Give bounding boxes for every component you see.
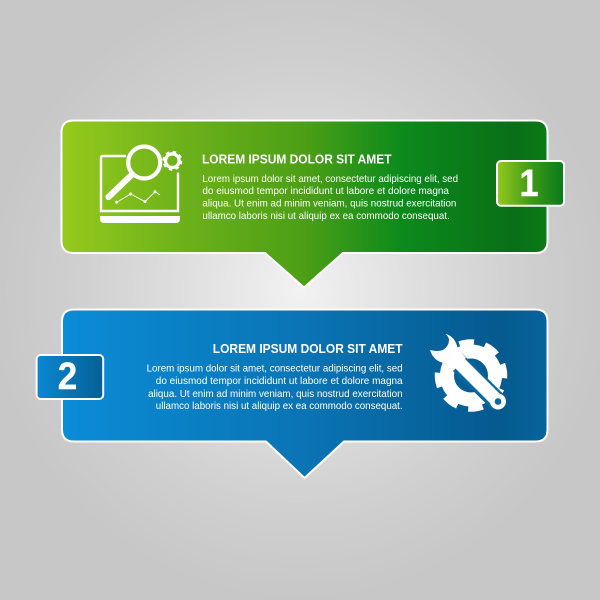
number badge 2: [37, 355, 103, 399]
number badge 1: 1: [520, 163, 538, 205]
icon: laptop with magnifier and gear: [100, 146, 181, 223]
icon: wrench and gear: [430, 334, 506, 410]
body text 2: ullamco laboris nisi ut aliquip ex ea commodo consequat.: [156, 401, 403, 412]
body text 2: do eiusmod tempor incididunt ut labore et dolore magna: [156, 376, 403, 387]
panel: step 1: [62, 120, 564, 288]
panel 2 callout shape: [62, 310, 548, 478]
panel 1 callout shape: [62, 120, 548, 288]
body text 1: Lorem ipsum dolor sit amet, consectetur adipiscing elit, sed: [202, 174, 458, 185]
body text 1: [202, 174, 458, 222]
number badge 1: [497, 161, 564, 206]
body text 1: do eiusmod tempor incididunt ut labore et dolore magna: [202, 186, 449, 197]
body text 2: aliqua. Ut enim ad minim veniam, quis nostrud exercitation: [148, 389, 403, 400]
body text 2: [147, 364, 403, 412]
number badge 2: 2: [58, 356, 77, 398]
body text 1: aliqua. Ut enim ad minim veniam, quis nostrud exercitation: [202, 199, 457, 210]
heading 2: LOREM IPSUM DOLOR SIT AMET: [213, 341, 403, 356]
panel: step 2: [37, 310, 547, 478]
body text 2: Lorem ipsum dolor sit amet, consectetur adipiscing elit, sed: [147, 364, 403, 375]
body text 1: ullamco laboris nisi ut aliquip ex ea commodo consequat.: [202, 211, 450, 222]
heading 1: LOREM IPSUM DOLOR SIT AMET: [202, 151, 392, 166]
